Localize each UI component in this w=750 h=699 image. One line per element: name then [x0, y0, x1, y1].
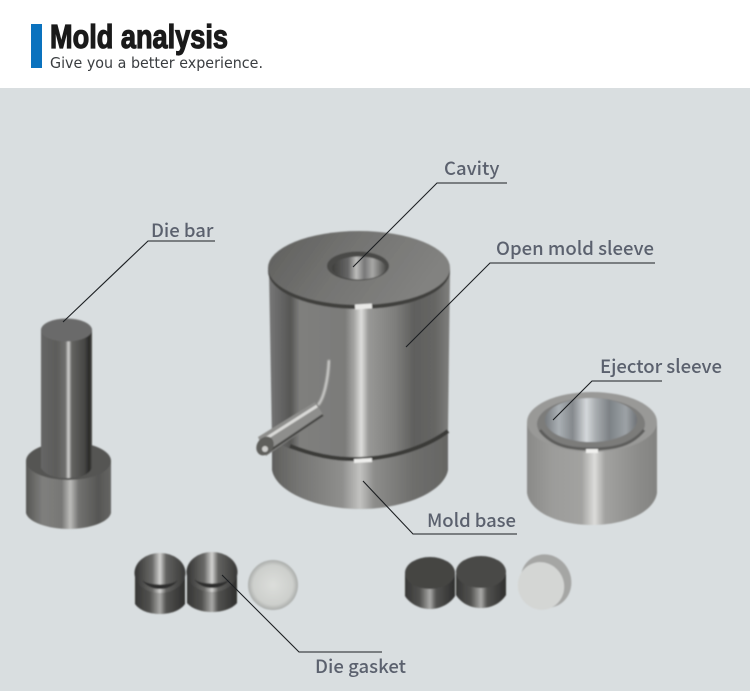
part: flat die gaskets — [405, 556, 506, 609]
part: ejector sleeve — [527, 392, 657, 525]
label: Mold base: Mold base — [427, 507, 516, 533]
label: Open mold sleeve: Open mold sleeve — [496, 235, 654, 261]
mold base — [272, 425, 448, 509]
label: Die bar: Die bar — [151, 217, 214, 243]
label: Ejector sleeve: Ejector sleeve — [600, 353, 722, 379]
label: Die gasket — [222, 575, 407, 679]
part: concave die gaskets — [134, 552, 238, 614]
label: Cavity: Cavity — [444, 155, 499, 181]
label: Ejector sleeve — [553, 353, 722, 420]
port tube — [258, 402, 324, 456]
label: Die bar — [63, 217, 215, 322]
title: Mold analysis — [50, 18, 228, 55]
groove — [290, 431, 448, 459]
label: Cavity — [353, 155, 507, 267]
cavity — [327, 252, 389, 280]
part: white ball — [248, 560, 298, 610]
bend highlight — [318, 360, 329, 405]
part: main mold cylinder — [253, 231, 450, 509]
label: Die gasket: Die gasket — [315, 653, 407, 679]
part: white disc — [510, 546, 580, 617]
label: Open mold sleeve — [406, 235, 655, 347]
label: Mold base — [363, 481, 517, 534]
blue accent bar — [31, 24, 42, 68]
open mold sleeve — [269, 270, 450, 460]
top face — [268, 233, 450, 309]
subtitle: Give you a better experience. — [50, 54, 263, 72]
heading block — [31, 18, 263, 72]
part: die bar — [26, 318, 111, 529]
